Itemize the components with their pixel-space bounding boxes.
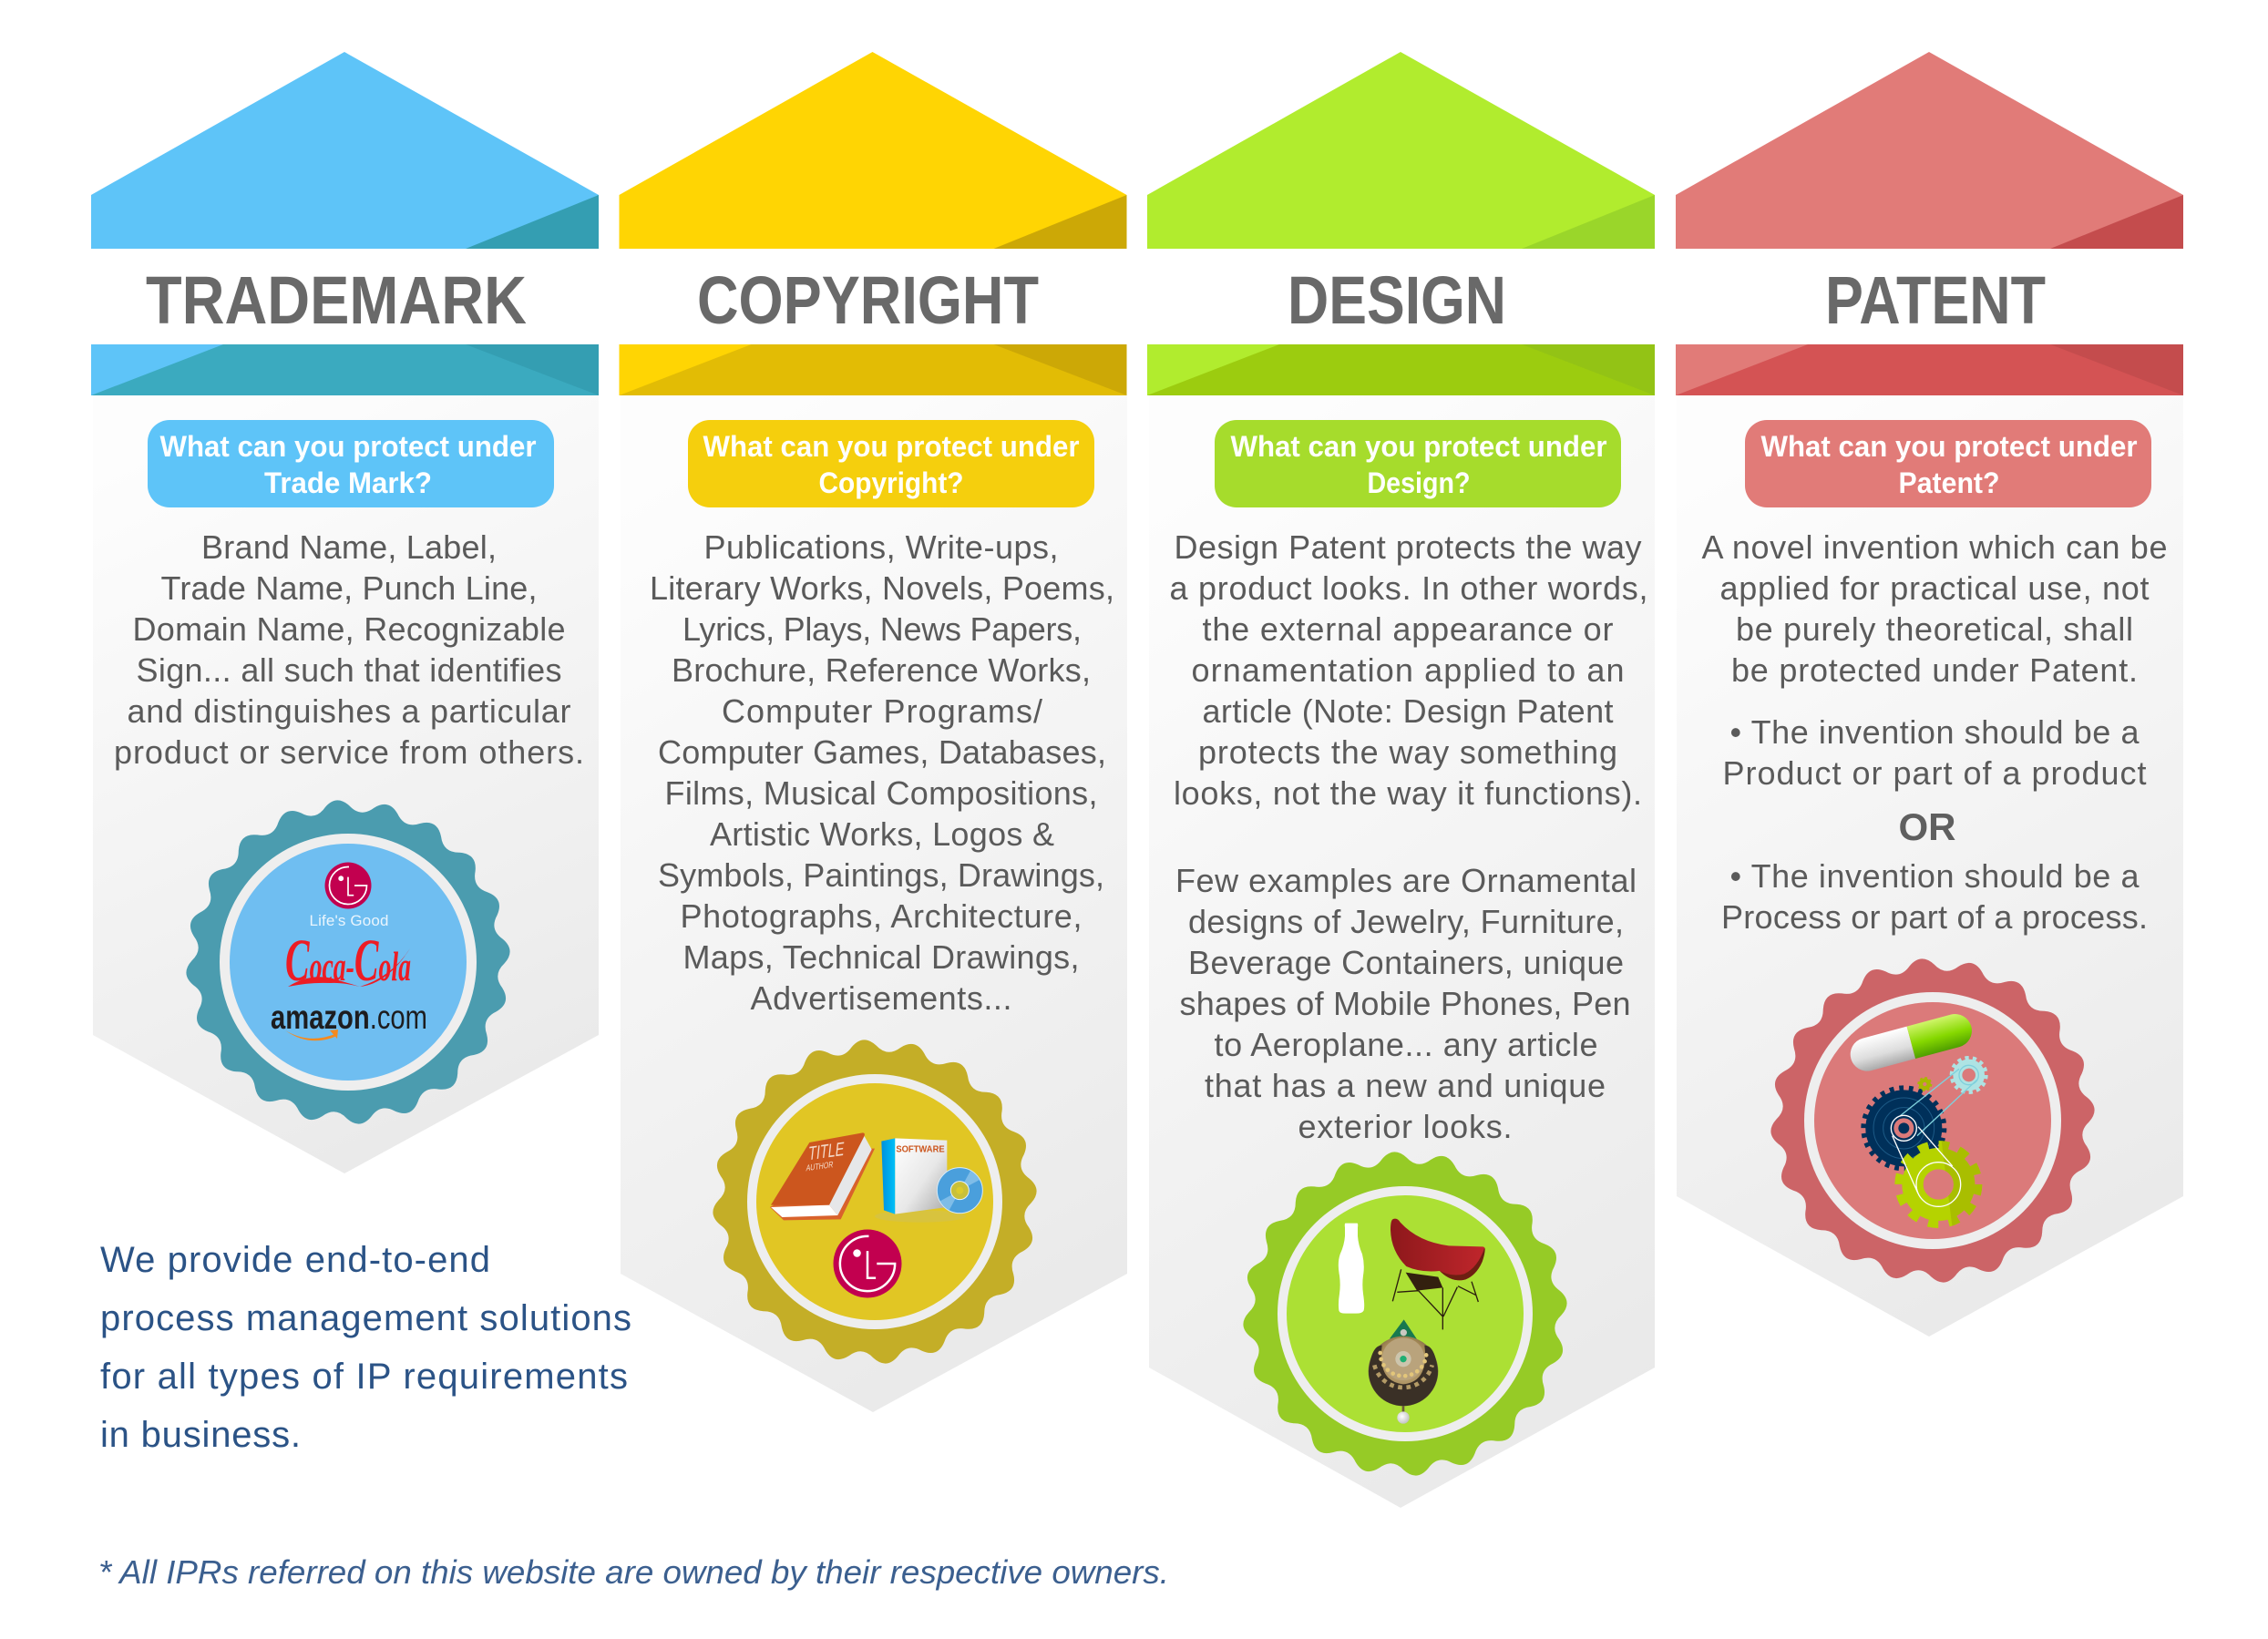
patent question pill: [1745, 420, 2151, 507]
patent description: [1702, 528, 2167, 936]
copyright description: Artistic Works, Logos &: [710, 815, 1054, 853]
design description: [1170, 528, 1647, 1145]
copyright description: Literary Works, Novels, Poems,: [650, 569, 1114, 607]
copyright question pill: Copyright?: [818, 466, 964, 499]
copyright badge: [702, 1029, 1048, 1375]
trademark description: product or service from others.: [114, 733, 584, 771]
icon: software box and disc: [875, 1138, 982, 1223]
icon: book: AUTHOR: [806, 1160, 834, 1173]
design body: [1149, 394, 1655, 1508]
copyright description: Computer Programs/: [722, 692, 1042, 730]
design description: article (Note: Design Patent: [1203, 692, 1613, 730]
trademark header: TRADEMARK: [146, 262, 527, 338]
icon: Amazon wordmark: amazon.com: [271, 999, 427, 1036]
copyright description: Publications, Write-ups,: [703, 528, 1059, 566]
design badge: [1232, 1141, 1578, 1487]
copyright question pill: What can you protect under: [703, 430, 1079, 463]
patent question pill: Patent?: [1899, 466, 1999, 499]
design description: that has a new and unique: [1205, 1067, 1606, 1104]
design question pill: [1215, 420, 1621, 507]
copyright body: [621, 394, 1127, 1412]
LG tagline: Life's Good: [310, 912, 388, 929]
copyright description: Films, Musical Compositions,: [665, 774, 1097, 812]
trademark question pill: Trade Mark?: [264, 466, 432, 499]
icon: Coca-Cola wordmark: Coca-Cola: [285, 927, 411, 994]
design description: Beverage Containers, unique: [1188, 944, 1624, 981]
design question pill: What can you protect under: [1230, 430, 1607, 463]
icon: book: [770, 1132, 875, 1220]
panel: patent: [1676, 52, 2183, 1337]
design description: exterior looks.: [1298, 1108, 1513, 1145]
closing statement: process management solutions: [100, 1298, 631, 1338]
copyright description: Photographs, Architecture,: [680, 897, 1083, 935]
trademark header: [91, 52, 599, 395]
patent description: be protected under Patent.: [1731, 651, 2138, 689]
design question pill: Design?: [1367, 466, 1471, 499]
patent description: OR: [1899, 805, 1955, 848]
copyright description: Maps, Technical Drawings,: [683, 938, 1079, 976]
patent description: • The invention should be a: [1729, 713, 2140, 751]
patent badge: [1770, 958, 2095, 1283]
copyright header: [620, 52, 1126, 395]
trademark description: and distinguishes a particular: [128, 692, 570, 730]
icon: drive belts: [1891, 1065, 1978, 1206]
design description: Design Patent protects the way: [1174, 528, 1642, 566]
patent header: PATENT: [1825, 262, 2046, 338]
trademark badge: [175, 789, 521, 1135]
panel: copyright: [620, 52, 1127, 1412]
icon: light blue gear: [1952, 1058, 1986, 1092]
trademark question pill: What can you protect under: [160, 430, 536, 463]
design header: DESIGN: [1288, 262, 1506, 338]
copyright description: Advertisements...: [751, 979, 1011, 1017]
trademark body: [93, 394, 599, 1173]
icon: book: TITLE: [807, 1139, 846, 1164]
trademark question pill: [148, 420, 554, 507]
icon: navy gear: [1864, 1089, 1944, 1168]
patent description: be purely theoretical, shall: [1736, 610, 2133, 648]
design description: the external appearance or: [1203, 610, 1613, 648]
patent body: [1677, 394, 2183, 1337]
design description: to Aeroplane... any article: [1214, 1026, 1598, 1063]
copyright description: Computer Games, Databases,: [658, 733, 1106, 771]
closing statement: We provide end-to-end: [100, 1240, 490, 1280]
patent description: Process or part of a process.: [1721, 898, 2148, 936]
copyright header: COPYRIGHT: [697, 262, 1039, 338]
icon: software box and disc: SOFTWARE: [896, 1144, 945, 1154]
trademark description: Brand Name, Label,: [201, 528, 497, 566]
design description: ornamentation applied to an: [1192, 651, 1624, 689]
icon: small green gear: [1918, 1078, 1931, 1091]
trademark description: Sign... all such that identifies: [137, 651, 561, 689]
copyright description: Brochure, Reference Works,: [672, 651, 1091, 689]
patent header: [1676, 52, 2183, 395]
patent description: A novel invention which can be: [1702, 528, 2167, 566]
copyright description: Lyrics, Plays, News Papers,: [682, 610, 1082, 648]
copyright description: Symbols, Paintings, Drawings,: [658, 856, 1104, 894]
design description: looks, not the way it functions).: [1174, 774, 1642, 812]
design description: protects the way something: [1198, 733, 1617, 771]
icon: green gear: [1899, 1145, 1978, 1224]
panel: design: [1147, 52, 1655, 1508]
closing statement: in business.: [100, 1415, 301, 1455]
design description: Few examples are Ornamental: [1175, 862, 1637, 899]
trademark description: [114, 528, 584, 771]
panel: trademark: [91, 52, 599, 1173]
closing statement: for all types of IP requirements: [100, 1357, 628, 1397]
copyright description: [650, 528, 1114, 1017]
design description: a product looks. In other words,: [1170, 569, 1647, 607]
icon: LG logo: [834, 1230, 901, 1297]
closing statement: [100, 1240, 631, 1455]
patent description: Product or part of a product: [1722, 754, 2147, 792]
icon: capsule: [1847, 1010, 1976, 1075]
icon: bottle: [1339, 1224, 1364, 1314]
patent description: • The invention should be a: [1729, 857, 2140, 895]
footnote: * All IPRs referred on this website are owned by their respective owners.: [98, 1553, 1169, 1591]
trademark description: Domain Name, Recognizable: [133, 610, 565, 648]
icon: pendant: [1369, 1319, 1438, 1424]
icon: chair: [1391, 1219, 1485, 1329]
patent question pill: What can you protect under: [1760, 430, 2138, 463]
copyright question pill: [688, 420, 1094, 507]
design description: shapes of Mobile Phones, Pen: [1179, 985, 1631, 1022]
design description: designs of Jewelry, Furniture,: [1188, 903, 1624, 940]
icon: LG logo: [324, 862, 372, 909]
trademark description: Trade Name, Punch Line,: [160, 569, 538, 607]
design header: [1147, 52, 1655, 395]
patent description: applied for practical use, not: [1720, 569, 2149, 607]
